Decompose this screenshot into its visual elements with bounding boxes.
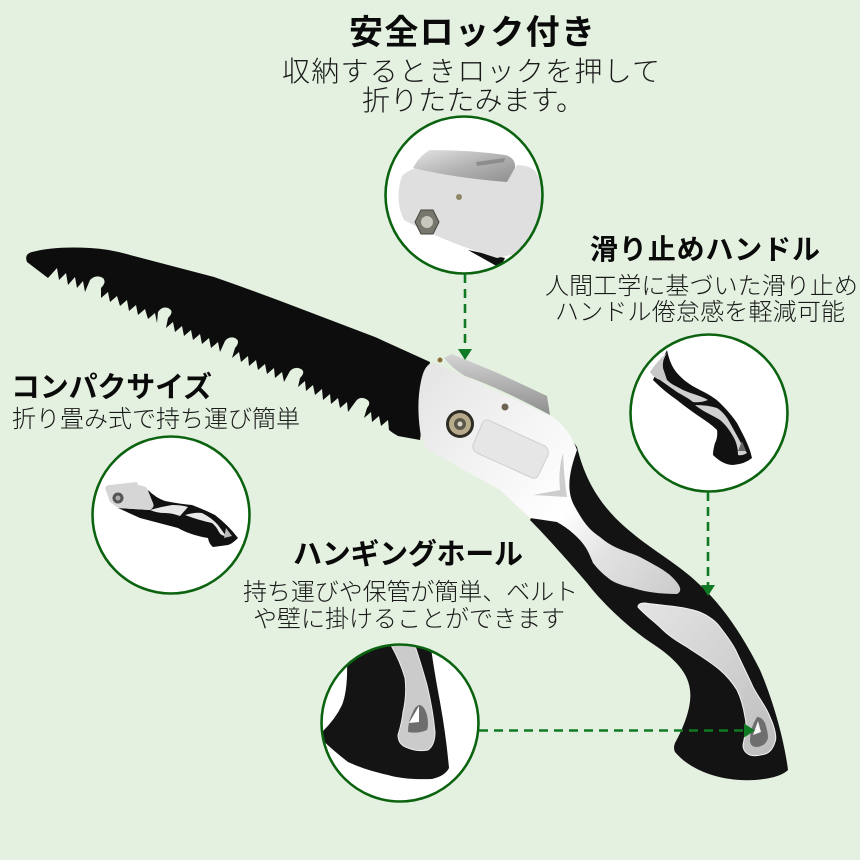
lock detail image [398,150,548,268]
circle: lock detail [384,115,548,275]
grip detail image [650,350,752,465]
hanging hole [750,717,768,747]
heading: compact size: コンパクサイズ [11,370,212,404]
saw blade [26,248,430,440]
description: non-slip handle: ハンドル倦怠感を軽減可能 [555,299,845,326]
silver lock [444,354,550,415]
description: hanging hole: や壁に掛けることができます [253,606,565,633]
description: non-slip handle: 人間工学に基づいた滑り止め [545,273,858,300]
handle white body [418,362,680,594]
heading: safety lock: 安全ロック付き [349,14,595,52]
text block: hanging hole [243,538,578,633]
description: non-slip handle [545,273,858,326]
circle: grip detail [629,333,789,493]
description: hanging hole: 持ち運びや保管が簡単、ベルト [243,579,578,606]
arrow: grip circle to saw grip [701,492,715,596]
text block: non-slip handle [545,234,858,326]
folded saw image [105,482,238,547]
description: safety lock: 収納するときロックを押して [282,56,660,87]
ring [92,436,250,594]
description: safety lock [282,56,660,116]
hole detail image [320,640,449,779]
ring [322,644,478,802]
small screw [502,404,508,410]
text block: compact size [11,370,300,433]
ring [630,334,788,492]
silver chevron inset [533,453,567,497]
description: hanging hole [243,579,578,633]
handle black grip [530,440,788,780]
circle: compact detail [91,435,251,595]
arrow: hole circle to saw hole [479,724,755,738]
description: safety lock: 折りたたみます。 [362,85,584,116]
text block: safety lock [282,14,660,116]
saw illustration [26,248,788,780]
circle: hanging hole detail [320,640,480,803]
silver grip [638,603,776,756]
heading: non-slip handle: 滑り止めハンドル [590,234,820,265]
lock rivet [438,358,442,362]
description: compact size: 折り畳み式で持ち運び簡単 [12,406,300,433]
label plate [473,420,548,478]
arrow: lock circle to saw lock [458,274,472,360]
ring [386,116,542,274]
heading: hanging hole: ハンギングホール [293,538,523,571]
pivot screw [446,410,474,438]
